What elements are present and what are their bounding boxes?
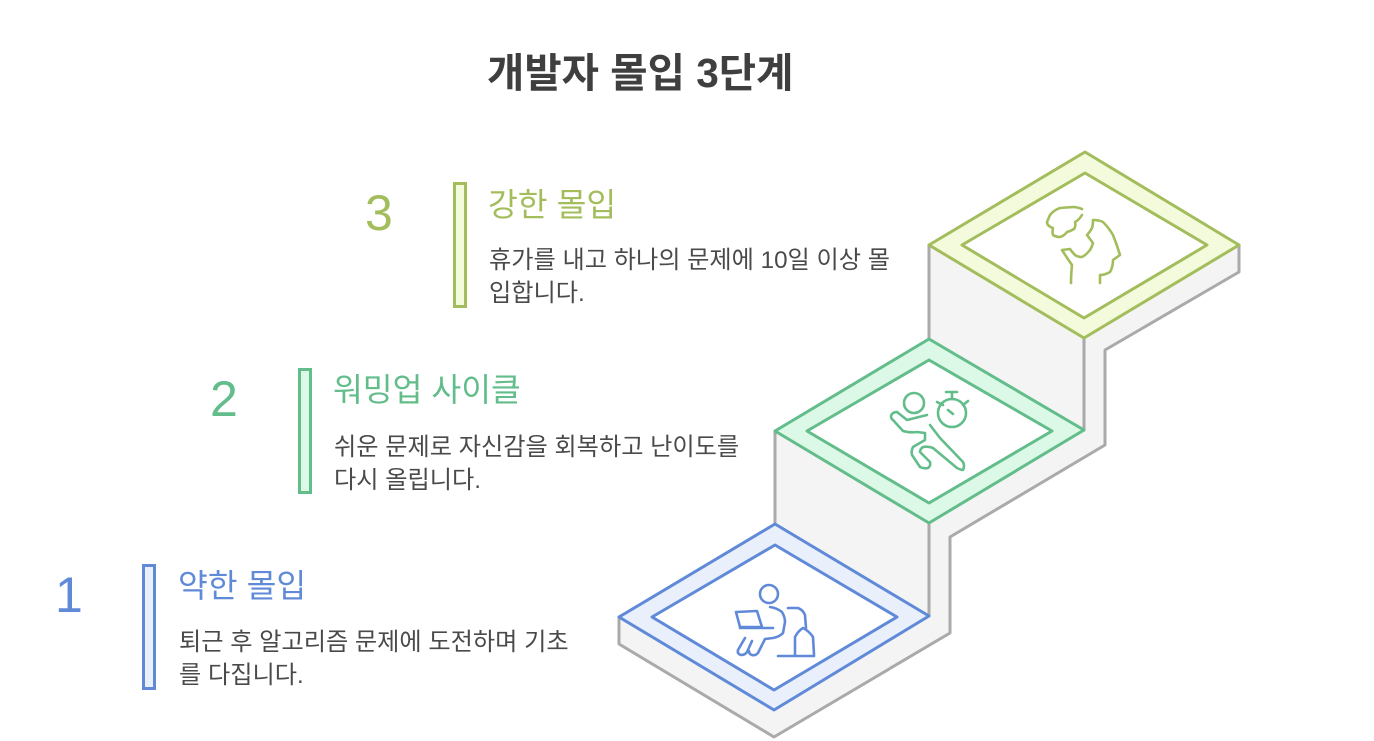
step 1 description (179, 629, 569, 689)
step 1 number: 1 (55, 567, 83, 623)
platform 1: blue (619, 524, 929, 710)
step 2 heading: 워밍업 사이클 (333, 372, 521, 408)
platform 3: yellow-green (929, 152, 1239, 338)
step 3 heading: 강한 몰입 (488, 187, 616, 223)
step 1 bar (142, 564, 156, 690)
step 3 description: 휴가를 내고 하나의 문제에 10일 이상 몰 (489, 247, 890, 274)
step 1 description: 를 다집니다. (179, 662, 304, 689)
step 2 description (334, 434, 739, 494)
step 2 number: 2 (210, 371, 238, 427)
step 3 bar (453, 182, 467, 308)
step 1 text block (55, 564, 569, 690)
step 2 bar (298, 368, 312, 494)
step 3 number: 3 (365, 185, 393, 241)
title: 개발자 몰입 3단계 (487, 50, 793, 96)
step 3 description (489, 247, 890, 307)
step 2 description: 다시 올립니다. (334, 467, 481, 494)
step 1 description: 퇴근 후 알고리즘 문제에 도전하며 기초 (179, 629, 569, 656)
icon: globe (1047, 207, 1120, 283)
icon: runner with stopwatch (891, 392, 968, 470)
step 1 heading: 약한 몰입 (178, 568, 306, 604)
platform 2: green (775, 339, 1084, 523)
step 3 description: 입합니다. (489, 280, 585, 307)
staircase side walls (619, 152, 1239, 737)
step 3 text block (365, 182, 890, 308)
step 2 description: 쉬운 문제로 자신감을 회복하고 난이도를 (334, 434, 739, 461)
icon: person at laptop (736, 585, 814, 656)
step 2 text block (210, 368, 739, 494)
